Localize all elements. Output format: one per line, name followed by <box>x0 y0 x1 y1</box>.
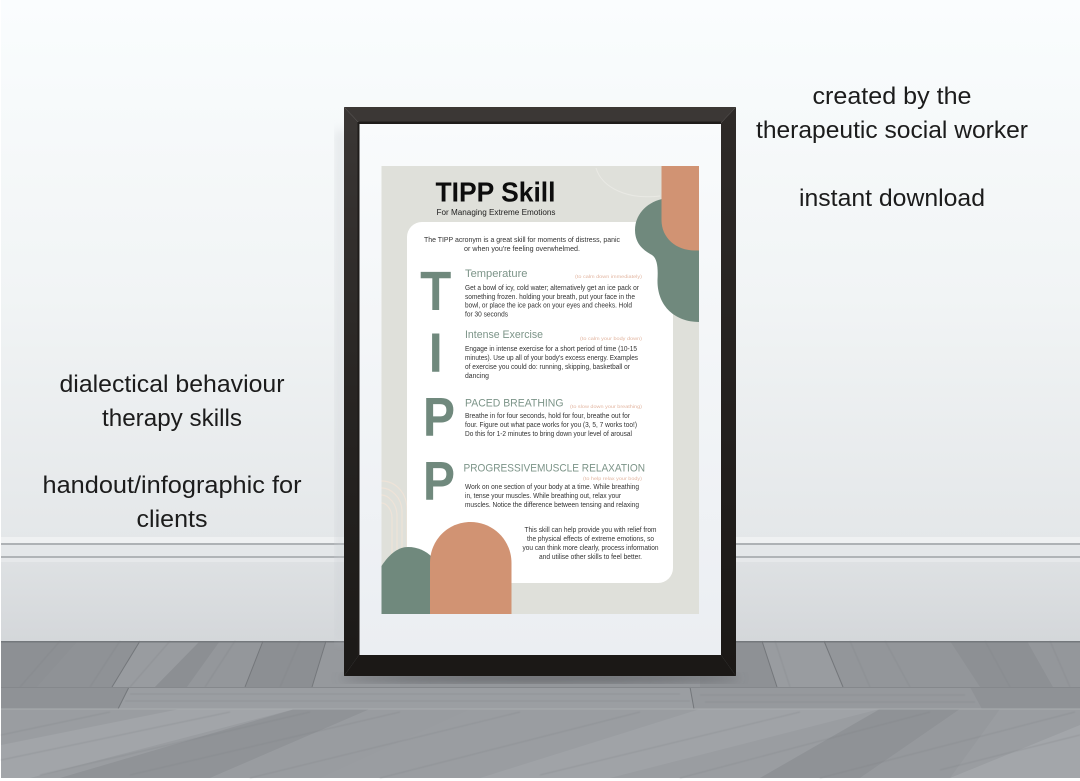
white content card <box>407 222 673 583</box>
section: Paced Breathing: four. Figure out what pace works for you (3, 5, 7 works too!) <box>465 422 637 429</box>
caption: left: dialectical behaviour <box>60 371 284 398</box>
skirting board <box>1 537 1080 641</box>
letter P (paced): P <box>423 386 455 448</box>
section: Progressive Muscle Relaxation: (to help relax your body) <box>583 476 642 482</box>
intro text: or when you're feeling overwhelmed. <box>464 244 580 253</box>
poster background <box>382 166 699 614</box>
section: Progressive Muscle Relaxation: in, tense your muscles. While breathing out, relax your <box>465 493 622 500</box>
intro text <box>424 235 620 253</box>
green arch bottom left <box>382 547 432 614</box>
closing text: This skill can help provide you with relief from <box>524 527 657 534</box>
decorative rings <box>382 481 407 560</box>
closing text: you can think more clearly, process information <box>522 545 659 552</box>
section: Temperature: (to calm down immediately) <box>575 274 642 280</box>
caption: left <box>42 371 302 533</box>
poster <box>382 166 699 614</box>
intro text: The TIPP acronym is a great skill for moments of distress, panic <box>424 235 620 244</box>
caption: left: clients <box>136 506 208 533</box>
section: Progressive Muscle Relaxation: Work on one section of your body at a time. While breathing <box>465 484 639 491</box>
section: Progressive Muscle Relaxation: PROGRESSIVEMUSCLE RELAXATION <box>464 462 645 474</box>
section: Temperature: for 30 seconds <box>465 312 508 318</box>
section: Intense Exercise: of exercise you could do: running, skipping, basketball or <box>465 364 631 371</box>
caption: left: handout/infographic for <box>42 472 302 499</box>
section: Paced Breathing: Do this for 1-2 minutes to bring down your level of arousal <box>465 431 632 438</box>
section: Temperature <box>465 268 642 318</box>
section: Intense Exercise: minutes). Use up all of your body's excess energy. Examples <box>465 355 638 362</box>
letter I: I <box>428 324 443 382</box>
wooden floor <box>1 641 1080 778</box>
orange arch bottom <box>430 522 512 614</box>
subtitle: For Managing Extreme Emotions <box>436 208 556 217</box>
caption: left: therapy skills <box>102 405 242 432</box>
closing text: and utilise other skills to feel better. <box>539 554 642 561</box>
closing text <box>522 527 659 561</box>
orange arch top right <box>662 166 699 250</box>
frame shadow on wall <box>336 130 344 640</box>
section: Temperature: bowl, or place the ice pack on your eyes and cheeks. Hold <box>465 302 632 310</box>
caption: right: therapeutic social worker <box>756 117 1028 144</box>
letter P (progressive): P <box>423 450 455 512</box>
title: TIPP Skill <box>436 176 556 208</box>
section: Intense Exercise: Engage in intense exercise for a short period of time (10-15 <box>465 346 637 353</box>
wood grain <box>1 641 1080 778</box>
closing text: the physical effects of extreme emotions, so <box>527 536 654 543</box>
section: Paced Breathing: (to slow down your breathing) <box>570 404 642 410</box>
section: Temperature: Temperature <box>465 268 528 280</box>
caption: right <box>756 83 1028 212</box>
section: Intense Exercise: dancing <box>465 373 489 380</box>
section: Intense Exercise: (to calm your body down) <box>580 336 642 342</box>
section: Paced Breathing: PACED BREATHING <box>465 398 564 410</box>
section: Paced Breathing <box>465 398 642 438</box>
frame shadow on floor <box>340 674 740 682</box>
section: Intense Exercise <box>465 329 642 380</box>
white mat <box>359 123 721 655</box>
green blob shape <box>635 199 699 322</box>
faint ring top right <box>596 168 660 197</box>
section: Intense Exercise: Intense Exercise <box>465 329 543 341</box>
section: Temperature: Get a bowl of icy, cold water; alternatively get an ice pack or <box>465 285 640 292</box>
section: Progressive Muscle Relaxation <box>464 462 645 509</box>
letter T: T <box>421 263 451 321</box>
caption: right: created by the <box>812 83 972 110</box>
section: Progressive Muscle Relaxation: muscles. Notice the difference between tensing and relaxing <box>465 502 639 509</box>
section: Paced Breathing: Breathe in for four seconds, hold for four, breathe out for <box>465 413 631 420</box>
caption: right: instant download <box>799 185 985 212</box>
picture frame <box>344 107 736 676</box>
section: Temperature: something frozen. holding your breath, put your face in the <box>465 294 635 301</box>
